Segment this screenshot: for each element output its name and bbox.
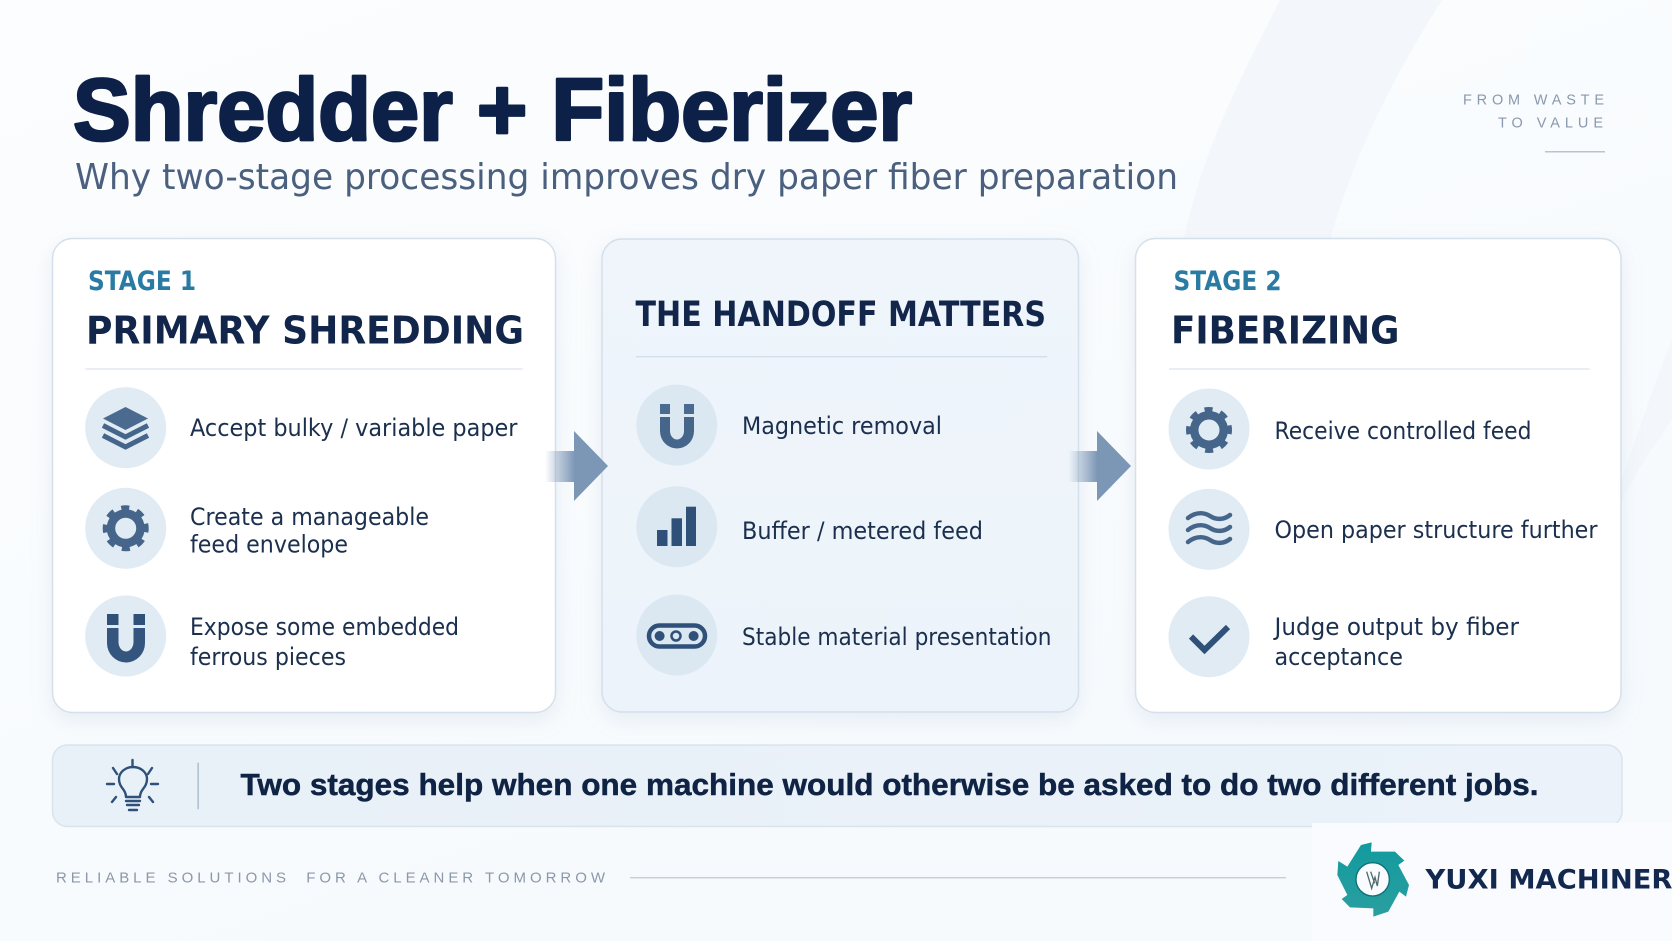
item text [190, 613, 459, 671]
panel: fiberizing [1136, 238, 1621, 712]
icon: bar chart [636, 486, 717, 567]
callout bar [52, 745, 1622, 826]
item text [190, 503, 429, 559]
icon: paper stack [85, 387, 166, 468]
item text [1273, 613, 1519, 671]
arrow: stage 1 to handoff [545, 431, 608, 501]
panel heading: FIBERIZING [1171, 309, 1400, 354]
tagline: from waste to value: FROM WASTE [1463, 92, 1604, 108]
icon: blade [1337, 842, 1409, 917]
item text: Create a manageable [190, 503, 429, 531]
arrow: handoff to stage 2 [1068, 431, 1131, 501]
tagline: from waste to value: TO VALUE [1498, 116, 1603, 132]
panel heading: PRIMARY SHREDDING [86, 308, 524, 354]
title: Shredder + Fiberizer [73, 60, 912, 159]
item text: Receive controlled feed [1274, 417, 1532, 445]
panel: the handoff matters [602, 239, 1078, 712]
icon: check [1168, 596, 1250, 677]
item text: Magnetic removal [742, 412, 942, 440]
item text: Expose some embedded [190, 613, 459, 641]
subtitle: Why two-stage processing improves dry paper fiber preparation [75, 157, 1178, 198]
panel heading: THE HANDOFF MATTERS [636, 295, 1046, 335]
panel: primary shredding [52, 238, 556, 712]
icon: conveyor [636, 594, 717, 676]
icon: waves [1168, 489, 1250, 570]
icon: magnet [636, 384, 717, 466]
item text: Accept bulky / variable paper [190, 414, 518, 442]
icon: gear [85, 488, 166, 569]
item text: Stable material presentation [742, 623, 1052, 651]
item text: ferrous pieces [190, 643, 346, 671]
stage label: STAGE 2 [1174, 266, 1282, 297]
footer tagline: RELIABLE SOLUTIONS FOR A CLEANER TOMORROW [56, 870, 606, 887]
item text: Judge output by fiber [1273, 613, 1519, 641]
icon: magnet [85, 596, 166, 676]
logo: yuxi machinery [1312, 823, 1672, 941]
stage label: STAGE 1 [88, 266, 196, 297]
icon: gear [1168, 388, 1250, 470]
item text: acceptance [1274, 643, 1403, 671]
tagline: from waste to value [1463, 92, 1605, 152]
item text: Open paper structure further [1274, 516, 1598, 544]
icon: light bulb [107, 760, 158, 810]
callout text: Two stages help when one machine would otherwise be asked to do two different jobs. [240, 767, 1538, 802]
logo text: YUXI MACHINER [1424, 864, 1672, 895]
item text: feed envelope [190, 531, 348, 559]
item text: Buffer / metered feed [742, 517, 983, 545]
